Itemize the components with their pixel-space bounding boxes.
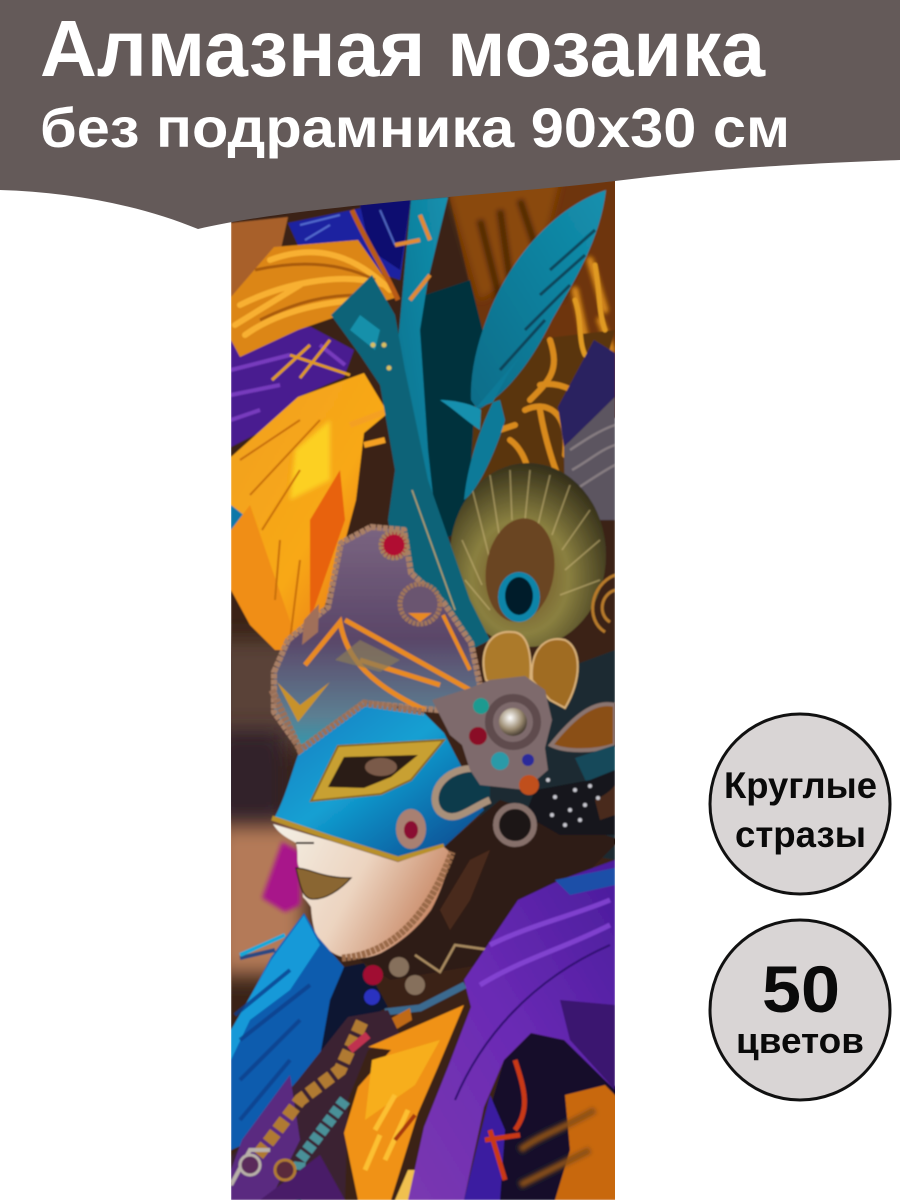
large orange feathers on the left: [231, 373, 390, 650]
top-left orange feathers: [231, 210, 398, 357]
blue feathers lower left: [231, 913, 344, 1150]
headdress right side and collar: [360, 650, 620, 980]
dark rear feathers with orange: [464, 1033, 620, 1200]
curl: [435, 768, 490, 817]
dark feather shadow, centre: [419, 279, 484, 538]
mask forehead: [274, 527, 481, 750]
cheek jewel: [396, 809, 426, 849]
badge: round rhinestones: Круглые: [724, 765, 877, 806]
painting: carnival mask: [215, 170, 620, 1200]
orange feather at the bottom: [344, 1005, 464, 1200]
eye opening: [311, 740, 444, 801]
dark purple panel and grey lace: [558, 340, 615, 520]
badge: round rhinestones: [710, 714, 890, 894]
purple feathers, upper left: [231, 327, 354, 447]
blue mask: [272, 690, 490, 860]
badge: round rhinestones: стразы: [735, 814, 866, 855]
bead ornaments right: [546, 778, 600, 827]
jewelled costume: [231, 1010, 400, 1200]
peacock feather: [450, 463, 615, 647]
brown fluff, right: [470, 265, 615, 510]
brooch: [432, 676, 552, 795]
blurred background behind the mask: [215, 640, 305, 975]
brown feathers top-right: [448, 170, 620, 420]
title: Алмазная мозаика: [40, 4, 765, 93]
header banner: [0, 0, 900, 229]
collar beads and chain: [320, 942, 486, 1052]
teal feathers: [331, 190, 606, 650]
badge: 50 colours: цветов: [736, 1020, 864, 1061]
subtitle: без подрамника 90х30 см: [40, 96, 790, 159]
purple feather, lower right: [408, 860, 615, 1200]
blue feathers at top: [288, 198, 411, 280]
badge: 50 colours: [710, 920, 890, 1100]
badge: 50 colours: 50: [762, 952, 840, 1026]
face: [273, 824, 452, 958]
gold petals: [484, 632, 578, 708]
